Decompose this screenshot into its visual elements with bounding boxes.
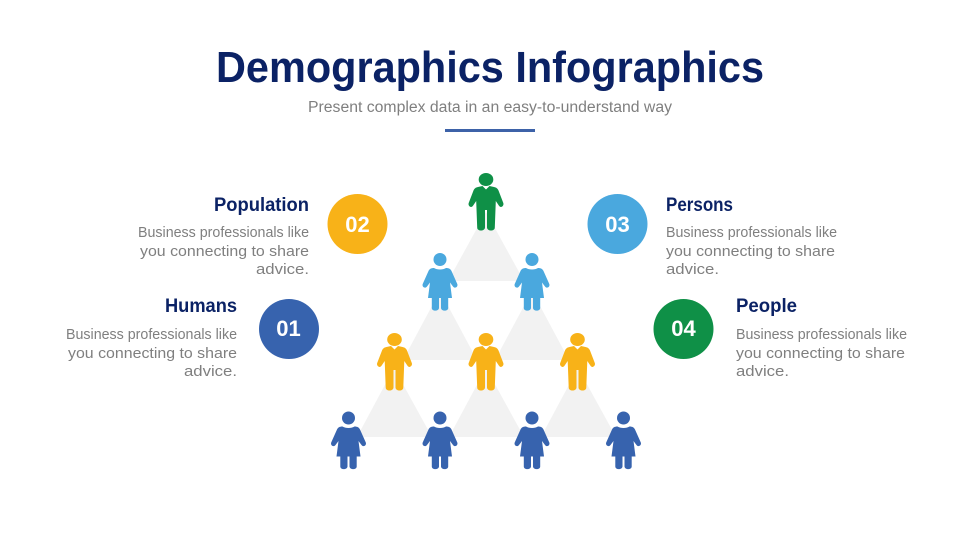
panel: persons: 03 (605, 212, 630, 237)
title: Demographics Infographics (216, 43, 764, 92)
panel: humans (66, 296, 319, 380)
pyramid background triangles (357, 212, 616, 437)
panel: population: advice. (256, 261, 309, 278)
panel: persons (588, 194, 837, 278)
figure: top row man (469, 173, 503, 230)
panel: people: 04 (671, 316, 696, 341)
title underline (445, 129, 535, 132)
panel: persons: Business professionals like (666, 224, 837, 241)
panel: humans: 01 (276, 316, 301, 341)
panel: people: you connecting to share (736, 345, 905, 362)
panel: population (138, 194, 388, 278)
panel: persons: advice. (666, 261, 719, 278)
panel: population: you connecting to share (140, 243, 309, 260)
panel: humans: Business professionals like (66, 326, 237, 343)
figures: second row women (423, 253, 549, 311)
subtitle: Present complex data in an easy-to-understand way (308, 99, 672, 116)
figures: third row men (377, 333, 595, 390)
panel: humans: Humans (165, 296, 237, 317)
panel: people: advice. (736, 363, 789, 380)
panel: persons: you connecting to share (666, 243, 835, 260)
panel: people: Business professionals like (736, 326, 907, 343)
panel: population: Business professionals like (138, 224, 309, 241)
panel: population: Population (214, 195, 309, 216)
figures: bottom row women (331, 412, 641, 469)
panel: population: 02 (345, 212, 370, 237)
panel: people: People (736, 296, 797, 317)
panel: persons: Persons (666, 195, 733, 216)
panel: humans: you connecting to share (68, 345, 237, 362)
panel: people (654, 296, 907, 380)
panel: humans: advice. (184, 363, 237, 380)
